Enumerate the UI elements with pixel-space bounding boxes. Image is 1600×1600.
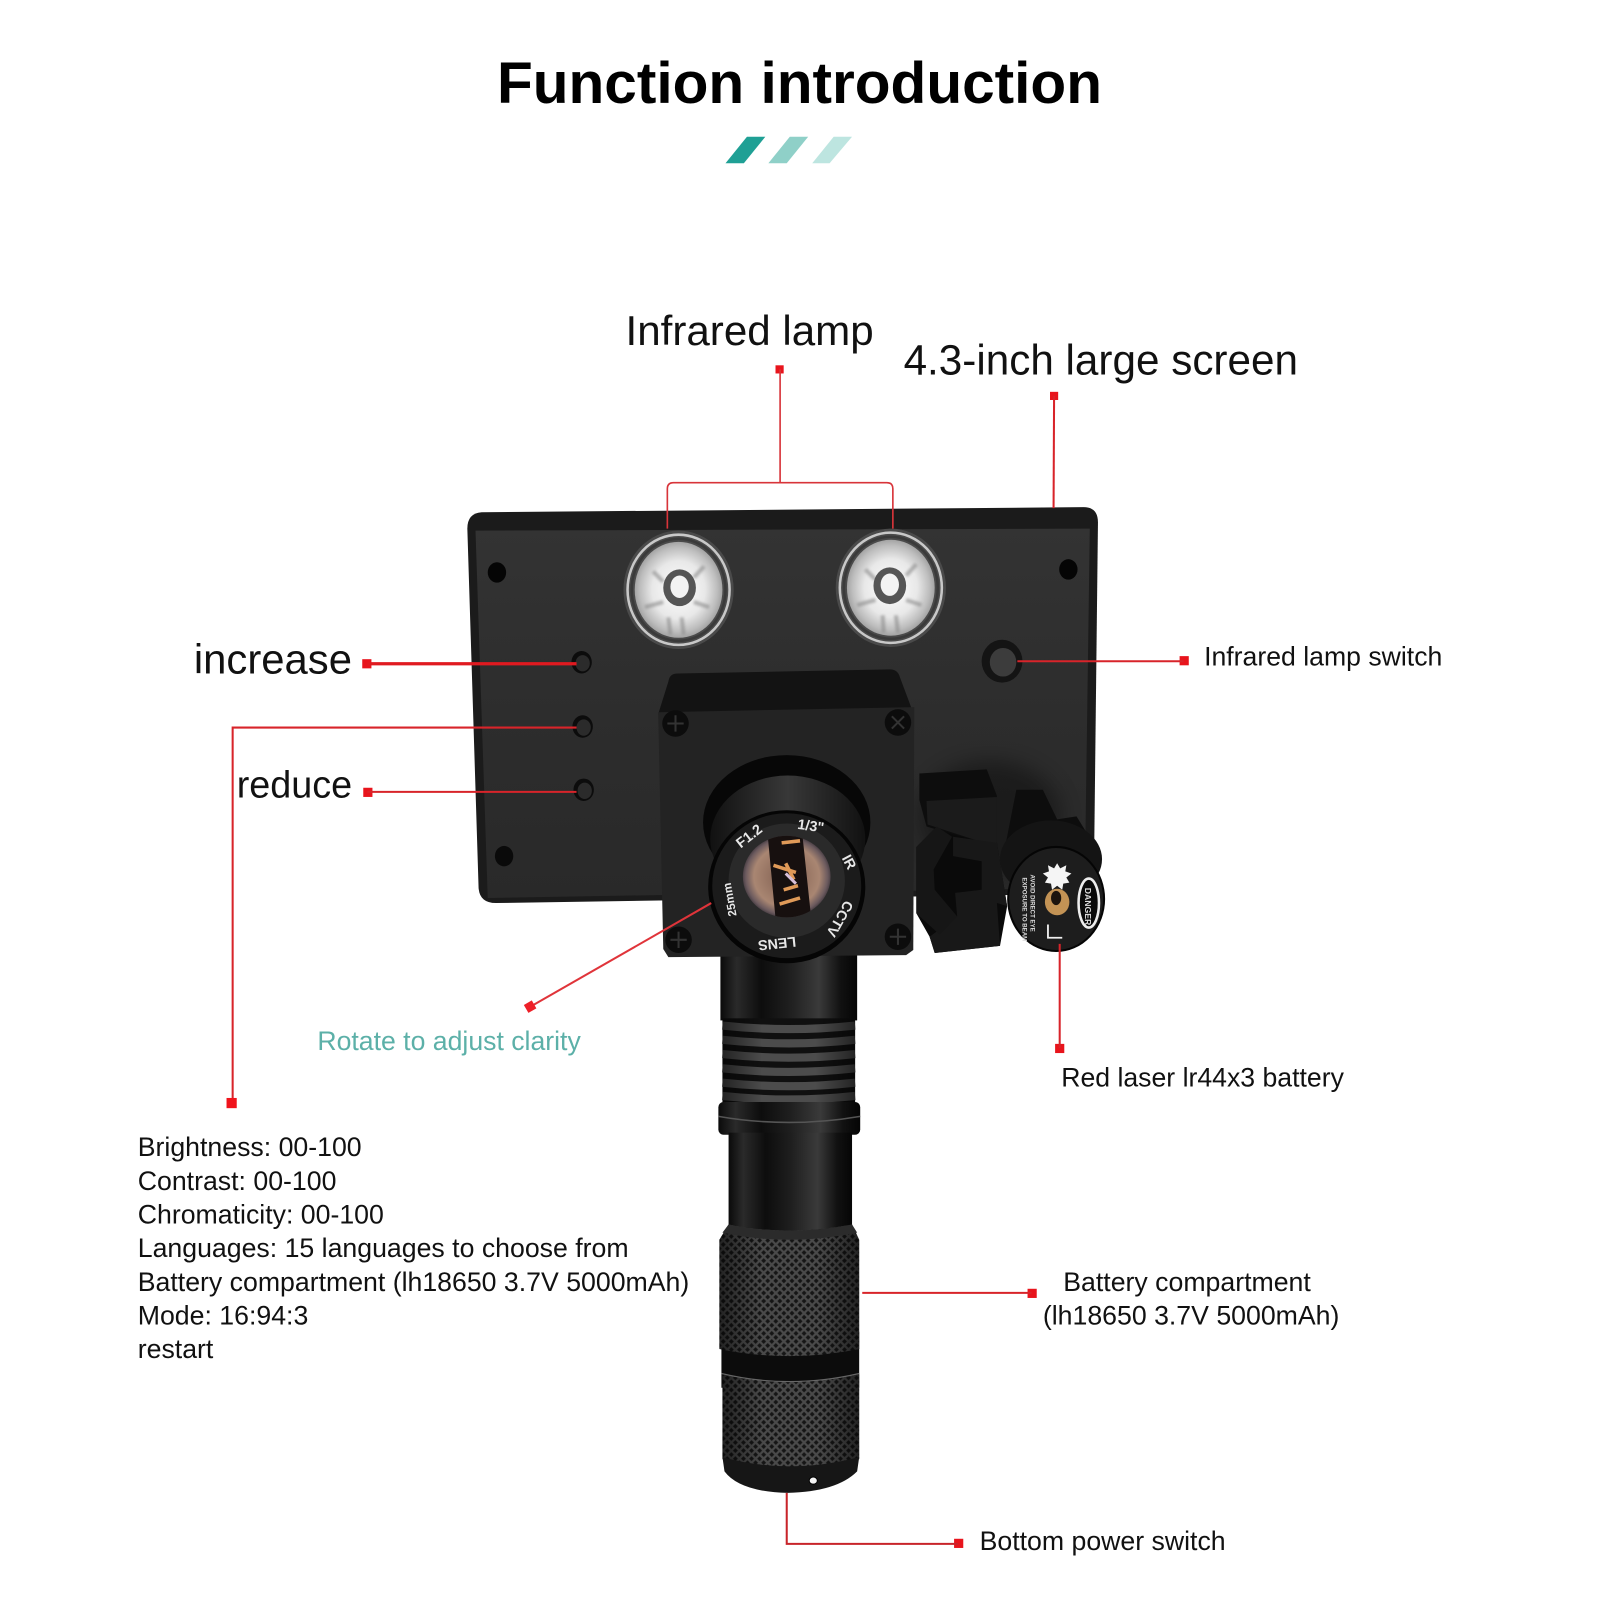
infrared lamp left [623, 531, 734, 649]
laser aperture [1045, 889, 1069, 915]
callout: reduce: reduce [237, 763, 352, 805]
callout: battery compartment [862, 1267, 1339, 1330]
callout: rotate to adjust clarity: Rotate to adjust clarity [317, 1026, 581, 1056]
infrared lamp switch button [982, 640, 1022, 683]
callout: menu line to settings [227, 728, 577, 1108]
settings list: Contrast: 00-100 [138, 1166, 336, 1196]
callout: reduce [237, 763, 577, 805]
settings list: Mode: 16:94:3 [138, 1300, 308, 1330]
device: night vision scope photo illustration [467, 507, 1104, 1493]
lens ring markings: IR [838, 852, 859, 873]
infographic canvas [139, 60, 1441, 1556]
callout: infrared lamp: Infrared lamp [626, 307, 874, 354]
lens ring markings [721, 817, 859, 953]
camera screws [662, 709, 911, 953]
camera module [658, 669, 914, 957]
laser warning text: AVOID DIRECT EYE [1029, 874, 1036, 932]
power switch hole [809, 1477, 817, 1484]
callout: large screen [904, 336, 1298, 508]
callout: battery compartment: (lh18650 3.7V 5000mAh) [1043, 1300, 1339, 1330]
screen back panel [467, 507, 1098, 903]
panel screw holes [488, 559, 1078, 866]
callout: bottom power switch: Bottom power switch [980, 1526, 1226, 1556]
settings list: Battery compartment (lh18650 3.7V 5000mAh) [138, 1267, 689, 1297]
lens ring markings: F1.2 [733, 822, 766, 852]
laser warning text [1020, 874, 1036, 941]
infrared lamp right [836, 529, 946, 647]
callout: increase: increase [194, 635, 352, 682]
callout: infrared lamp switch [1017, 641, 1442, 671]
adjust buttons [571, 651, 594, 801]
panel shadow behind laser [918, 760, 1061, 872]
callout: battery compartment: Battery compartment [1063, 1267, 1311, 1297]
laser clamp [916, 769, 1007, 953]
settings list: restart [138, 1334, 214, 1364]
callout: red laser battery [1055, 944, 1345, 1093]
handle: battery tube [718, 949, 860, 1493]
red laser module [1000, 790, 1104, 951]
lens ring markings: CCTV [822, 898, 856, 940]
settings list: Brightness: 00-100 [138, 1132, 362, 1162]
laser warning starburst [1043, 863, 1071, 890]
callout: increase [194, 635, 577, 682]
settings list [138, 1132, 689, 1364]
callout: large screen: 4.3-inch large screen [904, 336, 1298, 383]
settings list: Chromaticity: 00-100 [138, 1199, 384, 1229]
lens ring markings: 1/3" [796, 817, 825, 836]
laser warning text: EXPOSURE TO BEAM [1020, 878, 1027, 941]
callout: bottom power switch [787, 1493, 1226, 1556]
danger badge: DANGER [1083, 888, 1093, 926]
lens ring markings: LENS [757, 933, 797, 953]
lens inner reflection [767, 832, 811, 918]
danger badge [1079, 879, 1099, 928]
settings list: Languages: 15 languages to choose from [138, 1233, 629, 1263]
camera lens [703, 755, 870, 963]
title: Function introduction [497, 51, 1102, 116]
callout: rotate to adjust clarity [317, 903, 711, 1056]
lens ring markings: 25mm [721, 882, 740, 917]
callout: red laser battery: Red laser lr44x3 battery [1061, 1063, 1345, 1093]
title accent stripes [726, 137, 852, 163]
callout: infrared lamp [626, 307, 893, 529]
callout: infrared lamp switch: Infrared lamp switch [1204, 641, 1442, 671]
